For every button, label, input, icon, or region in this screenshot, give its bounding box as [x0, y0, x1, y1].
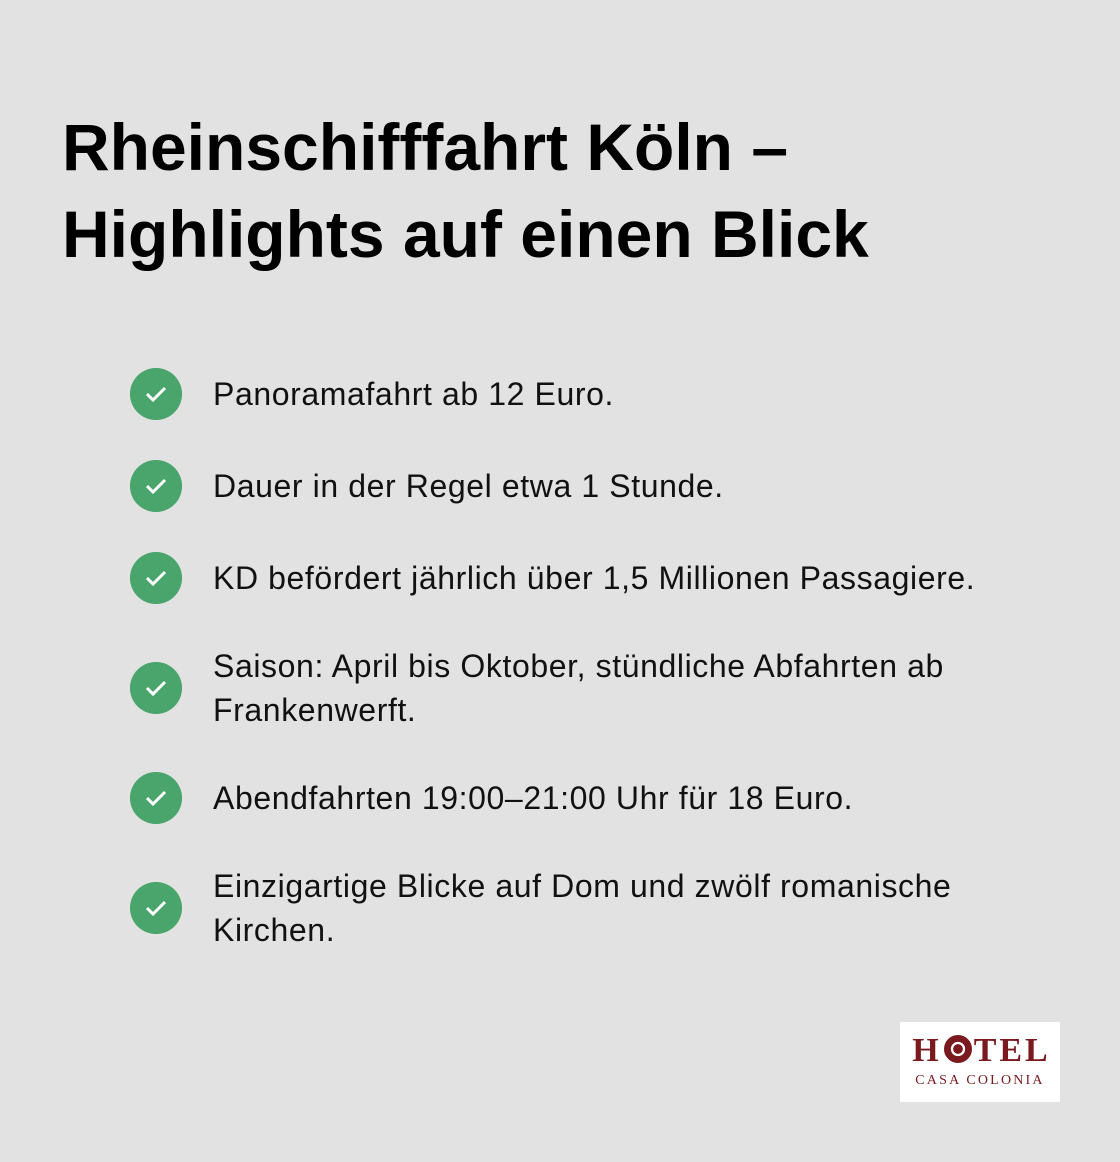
item 3	[130, 552, 975, 604]
logo: H TEL	[912, 1032, 1051, 1069]
title: Highlights auf einen Blick	[62, 197, 869, 271]
title: Rheinschifffahrt Köln –	[62, 110, 788, 184]
item 1: Panoramafahrt ab 12 Euro.	[213, 376, 614, 412]
icon: check	[130, 368, 182, 420]
item 5: Abendfahrten 19:00–21:00 Uhr für 18 Euro.	[213, 780, 853, 816]
logo: CASA COLONIA	[915, 1073, 1045, 1088]
item 4: Frankenwerft.	[213, 692, 416, 728]
logo	[900, 1022, 1060, 1102]
icon: check	[130, 662, 182, 714]
item 4: Saison: April bis Oktober, stündliche Abfahrten ab	[213, 648, 944, 684]
item 1	[130, 368, 614, 420]
item 4	[130, 648, 944, 728]
item 3: KD befördert jährlich über 1,5 Millionen Passagiere.	[213, 560, 975, 596]
item 5	[130, 772, 853, 824]
item 6: Kirchen.	[213, 912, 335, 948]
icon: check	[130, 460, 182, 512]
icon: check	[130, 552, 182, 604]
icon: check	[130, 882, 182, 934]
title	[62, 110, 869, 271]
icon: check	[130, 772, 182, 824]
item 2	[130, 460, 724, 512]
item 6	[130, 868, 951, 948]
item 2: Dauer in der Regel etwa 1 Stunde.	[213, 468, 724, 504]
item 6: Einzigartige Blicke auf Dom und zwölf romanische	[213, 868, 951, 904]
